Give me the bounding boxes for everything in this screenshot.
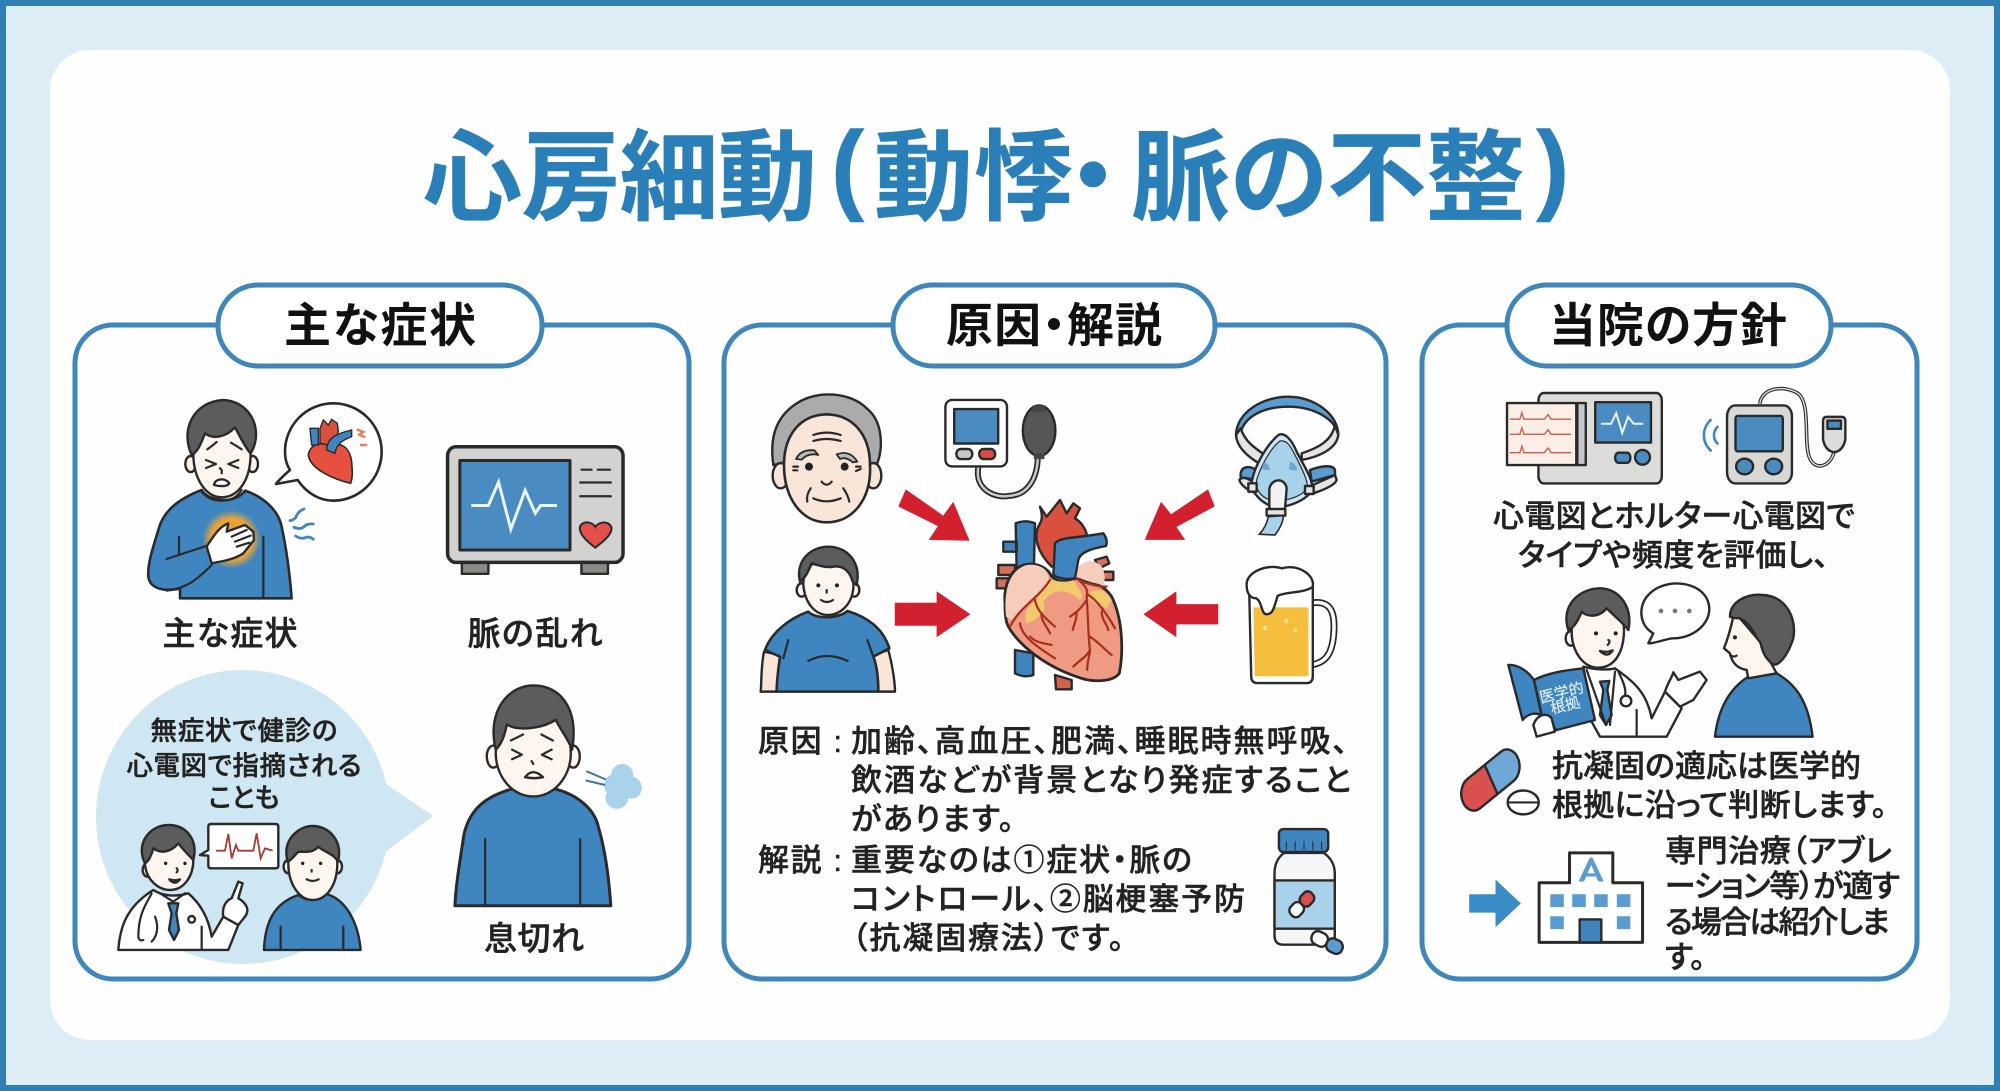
icon: man short of breath — [455, 685, 642, 906]
icon: anatomical heart — [997, 500, 1122, 689]
text block: referral: る場合は紹介しま — [1665, 905, 1890, 940]
icon: elderly man (aging) — [772, 394, 881, 522]
panel heading: 主な症状 — [218, 285, 542, 366]
icon: CPAP sleep apnea mask — [1236, 397, 1338, 535]
text: book label 医学的根拠: 医学的 — [1538, 679, 1586, 707]
text block: referral: 専門治療（アブレ — [1665, 826, 1892, 871]
icon: hospital: A — [1578, 856, 1605, 888]
text block: 原因: 原因 : — [758, 724, 842, 759]
panel: 原因・解説 — [724, 285, 1386, 979]
icon: doctor with book talking to patient — [1508, 583, 1813, 737]
text block: anticoagulation: 根拠に沿って判断します。 — [1552, 788, 1887, 823]
text block: ECG and Holter — [1493, 499, 1855, 573]
text block: 解説: （抗凝固療法）です。 — [852, 913, 1124, 958]
text block: 解説 — [758, 843, 1245, 958]
icon: heart rate monitor — [448, 447, 623, 574]
caption: 脈の乱れ: 脈の乱れ — [468, 615, 603, 652]
text block: 原因: 飲酒などが背景となり発症すること — [851, 763, 1351, 798]
icon: medicine bottle — [1275, 829, 1345, 956]
callout: asymptomatic speech bubble: 心電図で指摘される — [126, 751, 362, 781]
text: book label 医学的根拠: 根拠 — [1549, 694, 1582, 718]
text block: anticoagulation: 抗凝固の適応は医学的 — [1552, 749, 1861, 784]
icon: ECG machine — [1507, 393, 1662, 483]
title: ) — [1536, 111, 1569, 223]
caption: 息切れ: 息切れ — [484, 920, 584, 957]
panel: 主な症状 — [75, 285, 689, 979]
title: 脈の不整 — [1131, 97, 1525, 241]
title: ( — [831, 111, 865, 223]
caption: 主な症状: 主な症状 — [162, 615, 298, 652]
text block: referral: ーション等）が適す — [1665, 861, 1900, 906]
callout: asymptomatic speech bubble: ことも — [208, 783, 280, 813]
panel heading: 主な症状: 主な症状 — [284, 287, 476, 356]
icon: beer mug — [1247, 567, 1334, 683]
callout: asymptomatic speech bubble: 無症状で健診の — [150, 716, 338, 746]
text block: 原因: があります。 — [851, 802, 1014, 837]
icon: doctor showing ECG to patient — [118, 824, 361, 950]
title: 動悸 — [874, 97, 1073, 241]
panel heading: 原因・解説 — [893, 285, 1215, 366]
text block: anticoagulation — [1552, 749, 1887, 823]
callout: asymptomatic speech bubble — [96, 670, 433, 964]
icon: capsule and tablet — [1457, 743, 1539, 817]
panel heading: 当院の方針 — [1507, 285, 1831, 366]
icon: Holter monitor — [1704, 389, 1845, 483]
text block: referral: す。 — [1665, 940, 1705, 975]
title — [423, 97, 1569, 241]
icon: obese man — [761, 547, 895, 692]
text block: 解説: 解説 : — [758, 843, 842, 878]
text block: 原因: 加齢、高血圧、肥満、睡眠時無呼吸、 — [851, 724, 1348, 759]
title: 心房細動 — [423, 97, 817, 241]
arrows: red arrows to heart — [895, 489, 1218, 637]
panel: 当院の方針 — [1422, 285, 1917, 979]
text block: 解説: 重要なのは①症状・脈の — [851, 843, 1192, 878]
text block: 解説: コントロール、②脳梗塞予防 — [851, 882, 1245, 917]
text block: 原因 — [758, 724, 1351, 837]
arrow: to hospital — [1469, 880, 1521, 927]
text block: referral — [1665, 826, 1900, 975]
panel heading: 当院の方針: 当院の方針 — [1549, 287, 1787, 356]
title: ・ — [1068, 97, 1118, 241]
icon: hospital — [1539, 853, 1643, 942]
text block: ECG and Holter: タイプや頻度を評価し、 — [1518, 538, 1829, 573]
panel heading: 原因・解説: 原因・解説 — [946, 287, 1162, 356]
icon: blood pressure monitor — [945, 400, 1055, 496]
text block: ECG and Holter: 心電図とホルター心電図で — [1493, 499, 1855, 534]
icon: man holding chest — [148, 400, 382, 598]
